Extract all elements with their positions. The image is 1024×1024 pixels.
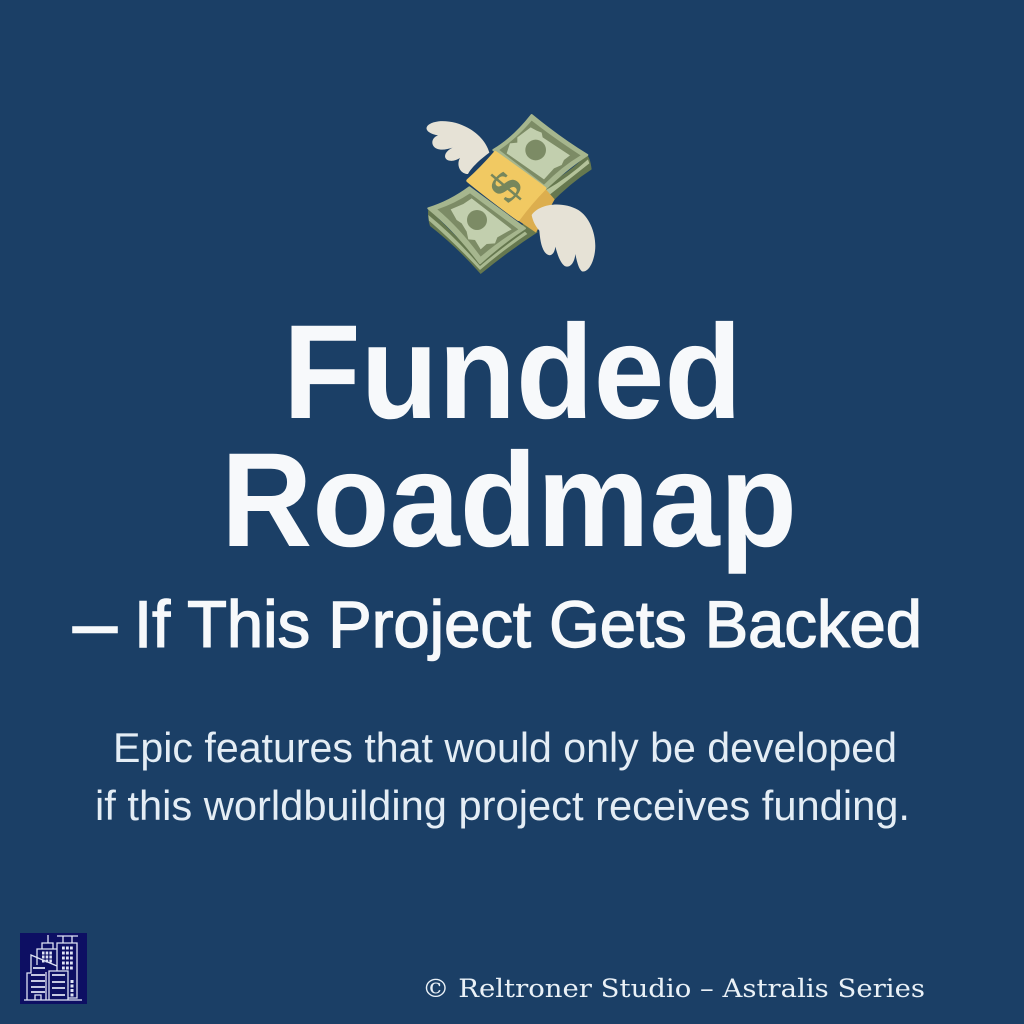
description text [95,724,910,829]
subtitle: — [73,586,117,662]
icon: flying money with wings [427,115,595,274]
right wing [532,205,595,272]
dollar sign: $ [477,159,534,214]
upper bill stack [493,115,592,204]
paper band with dollar sign [468,153,555,233]
description text: if this worldbuilding project receives funding. [95,782,910,829]
footer credit: © Reltroner Studio – Astralis Series [422,974,925,1003]
lower bill stack [428,187,538,274]
title: Funded [283,298,742,447]
title: Roadmap [221,426,797,575]
left wing [427,121,489,174]
subtitle: If This Project Gets Backed [134,587,922,661]
title [221,298,797,575]
description text: Epic features that would only be developed [113,724,897,771]
icon: city skyline logo [20,933,87,1004]
